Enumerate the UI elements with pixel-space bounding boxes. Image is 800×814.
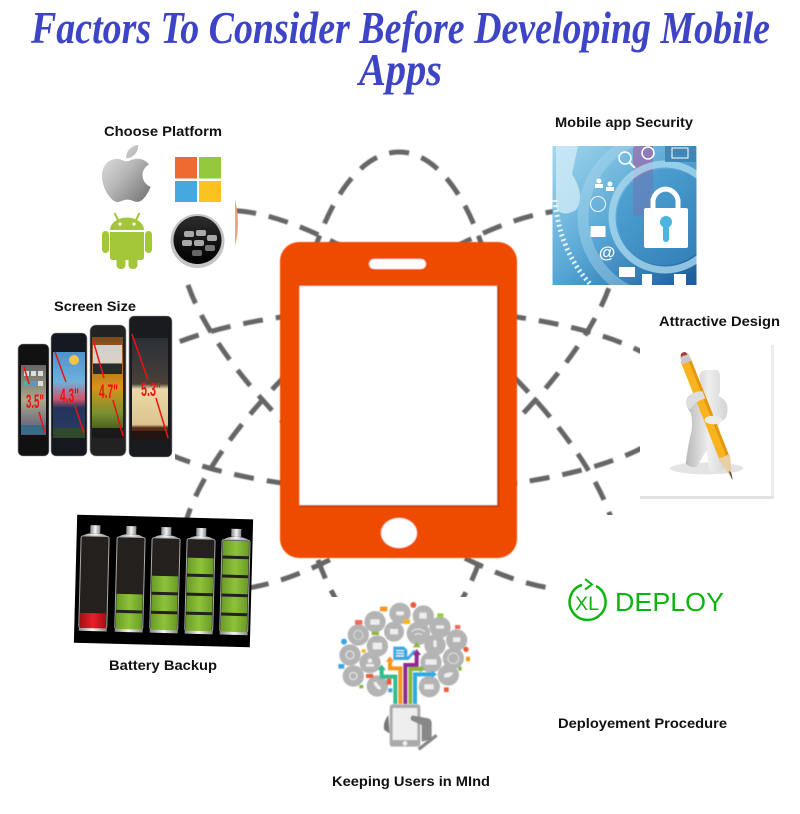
xl deploy logo [570, 579, 724, 620]
coloured accent icons [338, 602, 470, 692]
lock icon [644, 189, 688, 248]
label: screen size: Screen Size [54, 298, 136, 314]
xl deploy logo: DEPLOY [615, 587, 724, 617]
battery 5 [220, 529, 250, 635]
battery 1 [79, 525, 109, 632]
hand holding phone [384, 704, 437, 749]
phone 3.5: 3.5" [26, 392, 44, 413]
figure with pencil [670, 352, 743, 479]
title [30, 2, 770, 95]
white bubble glyphs [346, 611, 460, 690]
battery 2 [115, 526, 145, 632]
gray bubbles [339, 603, 467, 697]
coloured arrows [382, 655, 432, 704]
central phone [280, 242, 517, 558]
phone 5.3 [129, 316, 172, 457]
icon: blackberry [170, 214, 224, 268]
label: choose platform: Choose Platform [104, 123, 222, 139]
phone 4.7 [90, 325, 126, 456]
phone 5.3: 5.3" [141, 380, 161, 401]
phone 4.3 [51, 333, 87, 456]
battery 4 [185, 528, 215, 634]
xl deploy logo: XL [575, 594, 599, 615]
phone 3.5 [18, 344, 49, 456]
panel: choose platform [97, 123, 238, 275]
tree of app bubbles [338, 602, 470, 749]
icon: windows [175, 157, 221, 202]
panel: deployment [553, 515, 743, 731]
document icon [393, 642, 421, 660]
panel: mobile app security [552, 117, 696, 285]
panel: attractive design [640, 313, 780, 499]
dashed orbit lines [113, 152, 685, 648]
panel: keeping users in mind [326, 597, 490, 789]
panel: screen size [15, 298, 175, 461]
security image [552, 146, 696, 285]
icon: apple [102, 145, 151, 202]
title: Apps [356, 44, 442, 95]
label: attractive design: Attractive Design [659, 313, 780, 329]
battery 3 [150, 527, 180, 633]
phone 4.7: 4.7" [99, 382, 118, 403]
phone home button [381, 518, 417, 548]
battery image [74, 515, 253, 647]
label: mobile app security: Mobile app Security [555, 114, 693, 130]
label: battery backup: Battery Backup [109, 657, 217, 673]
icon: android [102, 213, 152, 269]
panel: battery backup [74, 515, 253, 673]
small white icons [590, 147, 688, 285]
label: deployement procedure: Deployement Procedure [558, 715, 727, 731]
phone 4.3: 4.3" [60, 386, 79, 407]
phone screen [300, 286, 497, 505]
small white icons: @ [599, 243, 615, 262]
label: keeping users in mind: Keeping Users in MInd [332, 773, 490, 789]
phone speaker [369, 259, 426, 269]
